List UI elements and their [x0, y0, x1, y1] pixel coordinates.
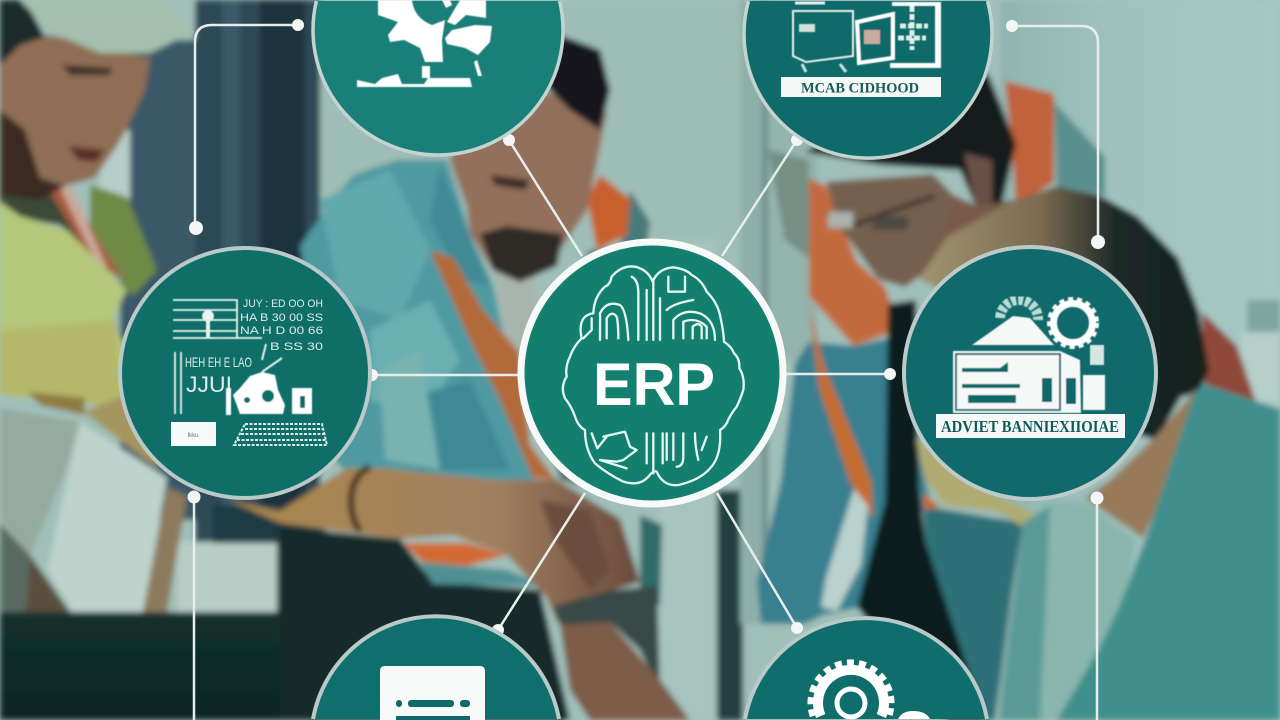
text: equipment label: MCAB CIDHOOD: [801, 80, 919, 96]
connector: lower right vertical: [1090, 492, 1104, 720]
text: ERP title: ERP: [593, 351, 715, 418]
icon: gears: [811, 663, 930, 719]
icon: machine cluster: [226, 344, 312, 415]
icon: machines and monitors: [793, 2, 941, 72]
icon: data table: [173, 300, 262, 414]
button: white label: [171, 422, 216, 446]
text: data grid: JUY : ED OO OH: [243, 298, 323, 310]
panel: right node with factory icon: [904, 247, 1156, 499]
icon: factory building: [953, 316, 1105, 413]
text: data grid: B SS 30: [270, 341, 323, 353]
text: data grid: HEH EH E LAO: [185, 354, 252, 370]
icon: circuit brain: [563, 266, 744, 485]
panel: left node with dashboard icon: [120, 248, 370, 498]
left worker: [0, 0, 193, 612]
icon: gears: [357, 0, 492, 87]
text: factory label: ADVIET BANNIEXIIOIAE: [941, 417, 1119, 436]
connector: lower left vertical: [188, 490, 200, 720]
connector: diagonal bottom-left: [492, 493, 585, 636]
text: data grid: HA B 30 00 SS: [240, 312, 323, 324]
foreground blond worker: [916, 186, 1280, 720]
text: equipment label: [781, 77, 941, 97]
connector: diagonal bottom-right: [717, 493, 803, 634]
panel: top-right node with equipment icon: [744, 1, 992, 158]
connector: diagonal top-left: [503, 134, 582, 256]
panel: top-left node with gear icon: [313, 0, 563, 155]
icon: document: [380, 666, 485, 720]
icon: keyboard grid: [234, 424, 327, 445]
text: data grid: JJUI: [186, 372, 232, 397]
connector: top-right elbow: [1006, 20, 1105, 249]
panel: bottom-right node with gear icon: [745, 618, 987, 719]
table and laptop: [0, 612, 330, 720]
centre worker: [228, 35, 690, 720]
panel: central ERP hub: [521, 242, 783, 504]
button: white label: Ikku: [187, 433, 199, 439]
connector: diagonal top-right: [722, 134, 803, 256]
connector: right: [786, 368, 896, 380]
connector: left: [366, 369, 518, 381]
panel: bottom-left node with document icon: [313, 616, 559, 720]
woman with glasses: [757, 73, 1105, 720]
text: data grid: [185, 298, 323, 397]
icon: gears above factory: [1000, 299, 1097, 347]
text: data grid: NA H D 00 66: [240, 325, 323, 337]
connector: top-left elbow: [189, 19, 304, 235]
